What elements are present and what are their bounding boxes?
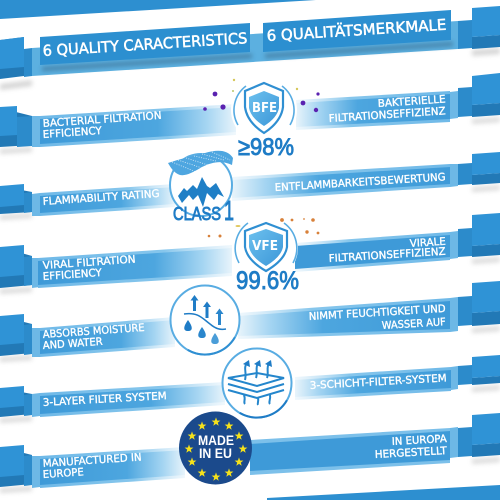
label: entflammbarkeitsbewertung (DE): ENTFLAMMBARKEITSBEWERTUNG xyxy=(274,171,446,194)
icon: filter layers xyxy=(222,348,292,418)
heading: English: 6 QUALITY CARACTERISTICS xyxy=(42,29,248,60)
label: bakterielle filtrationseffizienz (DE) xyxy=(296,91,458,130)
label: virale filtrationseffizienz (DE): FILTRATIONSEFFIZIENZ xyxy=(328,246,446,265)
icon: VFE shield xyxy=(234,216,299,295)
right tabs xyxy=(458,73,500,464)
text: CLASS 1: CLASS xyxy=(173,204,221,224)
label: absorbs moisture and water (EN): AND WATER xyxy=(42,336,103,352)
label: manufactured in europe (EN): EUROPE xyxy=(42,466,84,481)
top band xyxy=(0,0,316,19)
label: nimmt feuchtigkeit und wasser auf (DE): WASSER AUF xyxy=(381,316,446,332)
label: bacterial filtration efficiency (EN): BACTERIAL FILTRATION xyxy=(42,110,162,130)
label: in europa hergestellt (DE): HERGESTELLT xyxy=(374,445,448,461)
label: in europa hergestellt (DE): IN EUROPA xyxy=(391,433,448,448)
value: 99.6%: 99.6% xyxy=(236,267,299,295)
icon: made in EU badge: IN EU xyxy=(199,445,232,461)
icon: BFE shield: BFE xyxy=(252,100,277,116)
heading: German xyxy=(263,10,451,52)
label: absorbs moisture and water (EN) xyxy=(32,317,175,357)
label: nimmt feuchtigkeit und wasser auf (DE) xyxy=(238,297,458,339)
header row xyxy=(0,6,500,90)
label: bacterial filtration efficiency (EN): EFFICIENCY xyxy=(42,125,103,141)
label: bakterielle filtrationseffizienz (DE): FILTRATIONSEFFIZIENZ xyxy=(328,105,446,125)
particles: bacteria xyxy=(203,79,320,112)
label: 3-schicht-filter-system (DE) xyxy=(295,366,458,400)
label: viral filtration efficiency (EN) xyxy=(32,245,232,288)
icon: flammability class 1 xyxy=(168,151,234,226)
icon: made in EU badge xyxy=(179,412,252,484)
label: bacterial filtration efficiency (EN) xyxy=(32,104,236,147)
value: ≥98%: ≥98% xyxy=(238,134,294,161)
heading: German: 6 QUALITÄTSMERKMALE xyxy=(266,15,447,45)
icon: VFE shield: VFE xyxy=(252,238,278,254)
label: manufactured in europe (EN): MANUFACTURED IN xyxy=(42,451,142,470)
icon: BFE shield xyxy=(231,77,297,161)
label: virale filtrationseffizienz (DE): VIRALE xyxy=(409,236,446,250)
bottom band xyxy=(267,485,500,500)
label: virale filtrationseffizienz (DE) xyxy=(295,231,458,272)
label: 3-schicht-filter-system (DE): 3-SCHICHT-FILTER-SYSTEM xyxy=(309,372,447,392)
icon: moisture xyxy=(170,286,240,355)
label: absorbs moisture and water (EN): ABSORBS MOISTURE xyxy=(42,322,145,341)
label: nimmt feuchtigkeit und wasser auf (DE): NIMMT FEUCHTIGKEIT UND xyxy=(308,303,446,323)
label: 3-layer filter system (EN) xyxy=(32,382,225,417)
particles: viruses xyxy=(208,218,319,238)
icon: flammability class 1: 1 xyxy=(224,195,234,226)
label: viral filtration efficiency (EN): VIRAL FILTRATION xyxy=(42,254,136,272)
icon: made in EU badge: MADE xyxy=(198,432,234,448)
label: flammability rating (EN): FLAMMABILITY RATING xyxy=(42,188,160,208)
left tabs xyxy=(0,106,32,493)
label: in europa hergestellt (DE) xyxy=(250,427,458,475)
label: entflammbarkeitsbewertung (DE) xyxy=(232,164,458,201)
label: bakterielle filtrationseffizienz (DE): BAKTERIELLE xyxy=(377,94,446,110)
label: 3-layer filter system (EN): 3-LAYER FILTER SYSTEM xyxy=(42,390,167,409)
label: flammability rating (EN) xyxy=(32,184,175,216)
label: manufactured in europe (EN) xyxy=(32,447,185,488)
label: viral filtration efficiency (EN): EFFICIENCY xyxy=(42,267,103,283)
